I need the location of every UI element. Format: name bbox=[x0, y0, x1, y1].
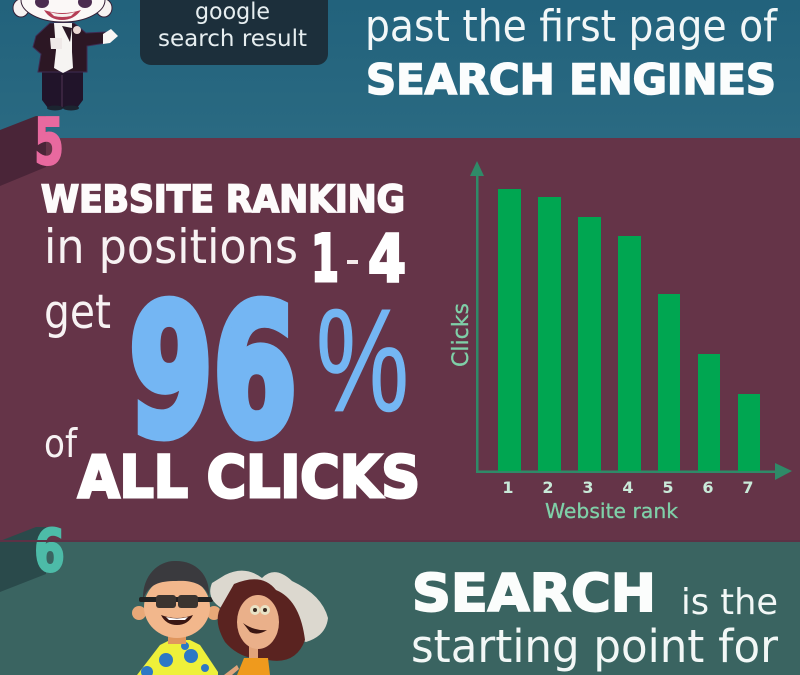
bars bbox=[498, 189, 760, 471]
heading: search: SEARCH bbox=[412, 564, 656, 624]
x-axis rank numbers: 2 bbox=[542, 478, 554, 497]
number: 1-4 bbox=[311, 222, 406, 297]
number: 5: 5 bbox=[34, 106, 64, 180]
callout: google search result bbox=[140, 0, 328, 65]
panel: section 6 search starting point bbox=[0, 516, 800, 675]
woman bbox=[210, 571, 328, 675]
symbol: percent: % bbox=[316, 279, 409, 443]
x-axis rank numbers: 1 bbox=[502, 478, 514, 497]
y-axis title: Clicks bbox=[449, 303, 474, 367]
number: 1-4: 4 bbox=[368, 222, 406, 297]
text: is the: is the bbox=[681, 582, 778, 623]
panel: section 5 website ranking bbox=[0, 106, 800, 542]
x-axis rank numbers: 6 bbox=[702, 478, 714, 497]
text: get: get bbox=[44, 285, 111, 340]
x-axis rank numbers bbox=[502, 478, 754, 497]
number: 6: 6 bbox=[34, 516, 65, 585]
ribbon: section 5 bbox=[0, 116, 46, 186]
heading: search engines: SEARCH ENGINES bbox=[366, 55, 776, 104]
man bbox=[132, 561, 221, 675]
icon: man and woman cartoon couple bbox=[132, 561, 328, 675]
x-axis title: Website rank bbox=[545, 499, 678, 523]
bar chart: clicks by website rank bbox=[449, 161, 792, 523]
heading: all clicks: ALL CLICKS bbox=[78, 443, 420, 511]
number: 96: 96 bbox=[129, 268, 297, 477]
ribbon: section 6 bbox=[0, 527, 46, 592]
panel: section 4 search engines bbox=[0, 0, 800, 138]
chart axes bbox=[470, 161, 792, 480]
text: starting point for: starting point for bbox=[411, 620, 778, 673]
number: 1-4: 1 bbox=[311, 222, 339, 297]
callout: google search result: search result bbox=[158, 26, 307, 52]
x-axis rank numbers: 4 bbox=[622, 478, 634, 497]
x-axis rank numbers: 5 bbox=[662, 478, 674, 497]
text: in positions: in positions bbox=[44, 220, 298, 275]
x-axis rank numbers: 7 bbox=[742, 478, 754, 497]
divider line bbox=[0, 540, 800, 542]
heading: website ranking: WEBSITE RANKING bbox=[41, 178, 405, 221]
text: of: of bbox=[44, 422, 78, 467]
x-axis rank numbers: 3 bbox=[582, 478, 594, 497]
icon: tuxedo mascot bbox=[13, 0, 118, 110]
